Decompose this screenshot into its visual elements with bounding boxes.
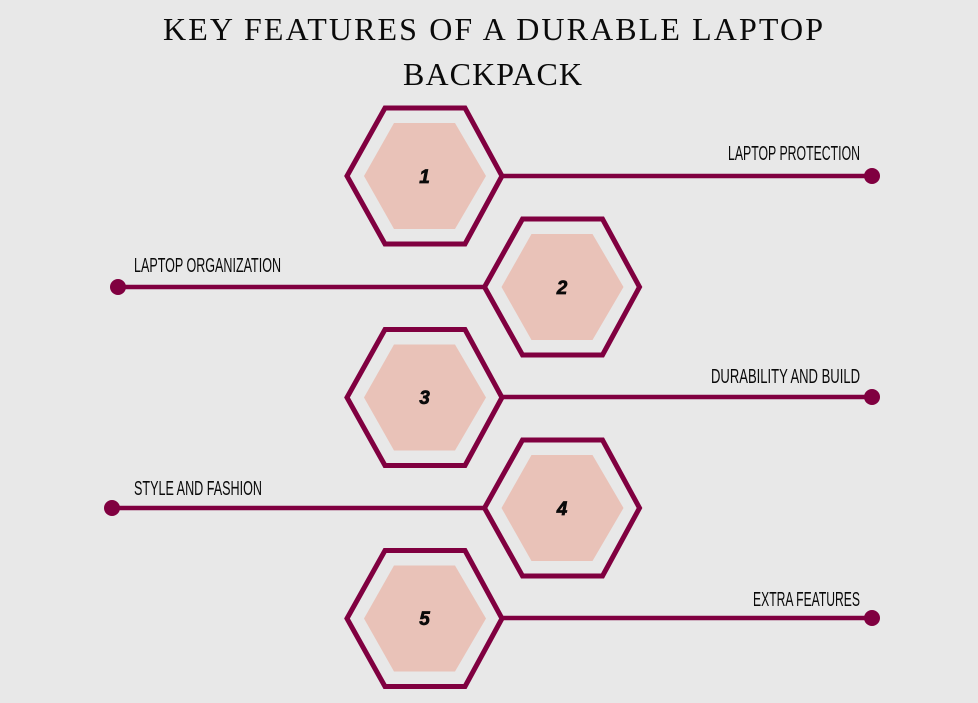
- connector line 5: [501, 616, 872, 620]
- label 3: DURABILITY AND BUILD: [711, 366, 860, 388]
- label 2: LAPTOP ORGANIZATION: [134, 255, 281, 277]
- hexagon 1: [347, 108, 502, 244]
- title: KEY FEATURES OF A DURABLE LAPTOP: [163, 11, 823, 47]
- label 5: EXTRA FEATURES: [753, 589, 860, 611]
- label 1: LAPTOP PROTECTION: [728, 143, 860, 165]
- title: BACKPACK: [403, 56, 582, 92]
- number 1: 1: [419, 167, 430, 188]
- number 2: 2: [556, 278, 568, 299]
- title: [163, 11, 823, 92]
- dot 2: [110, 279, 126, 295]
- connector line 1: [501, 174, 872, 178]
- dot 3: [864, 389, 880, 405]
- number 4: 4: [556, 499, 568, 520]
- feature 1: laptop protection: [347, 108, 880, 244]
- hexagon 3: [347, 330, 502, 466]
- number 3: 3: [419, 388, 430, 409]
- hexagon 2: [484, 219, 640, 355]
- dot 4: [104, 500, 120, 516]
- connector line 4: [112, 506, 486, 510]
- feature 3: durability and build: [347, 330, 880, 466]
- label 4: STYLE AND FASHION: [134, 478, 262, 500]
- connector line 3: [501, 395, 872, 399]
- dot 5: [864, 610, 880, 626]
- feature 4: style and fashion: [104, 440, 640, 576]
- dot 1: [864, 168, 880, 184]
- number 5: 5: [419, 609, 430, 630]
- feature 2: laptop organization: [110, 219, 640, 355]
- connector line 2: [118, 285, 486, 289]
- hexagon 4: [484, 440, 640, 576]
- hexagon 5: [347, 550, 502, 686]
- feature 5: extra features: [347, 550, 880, 686]
